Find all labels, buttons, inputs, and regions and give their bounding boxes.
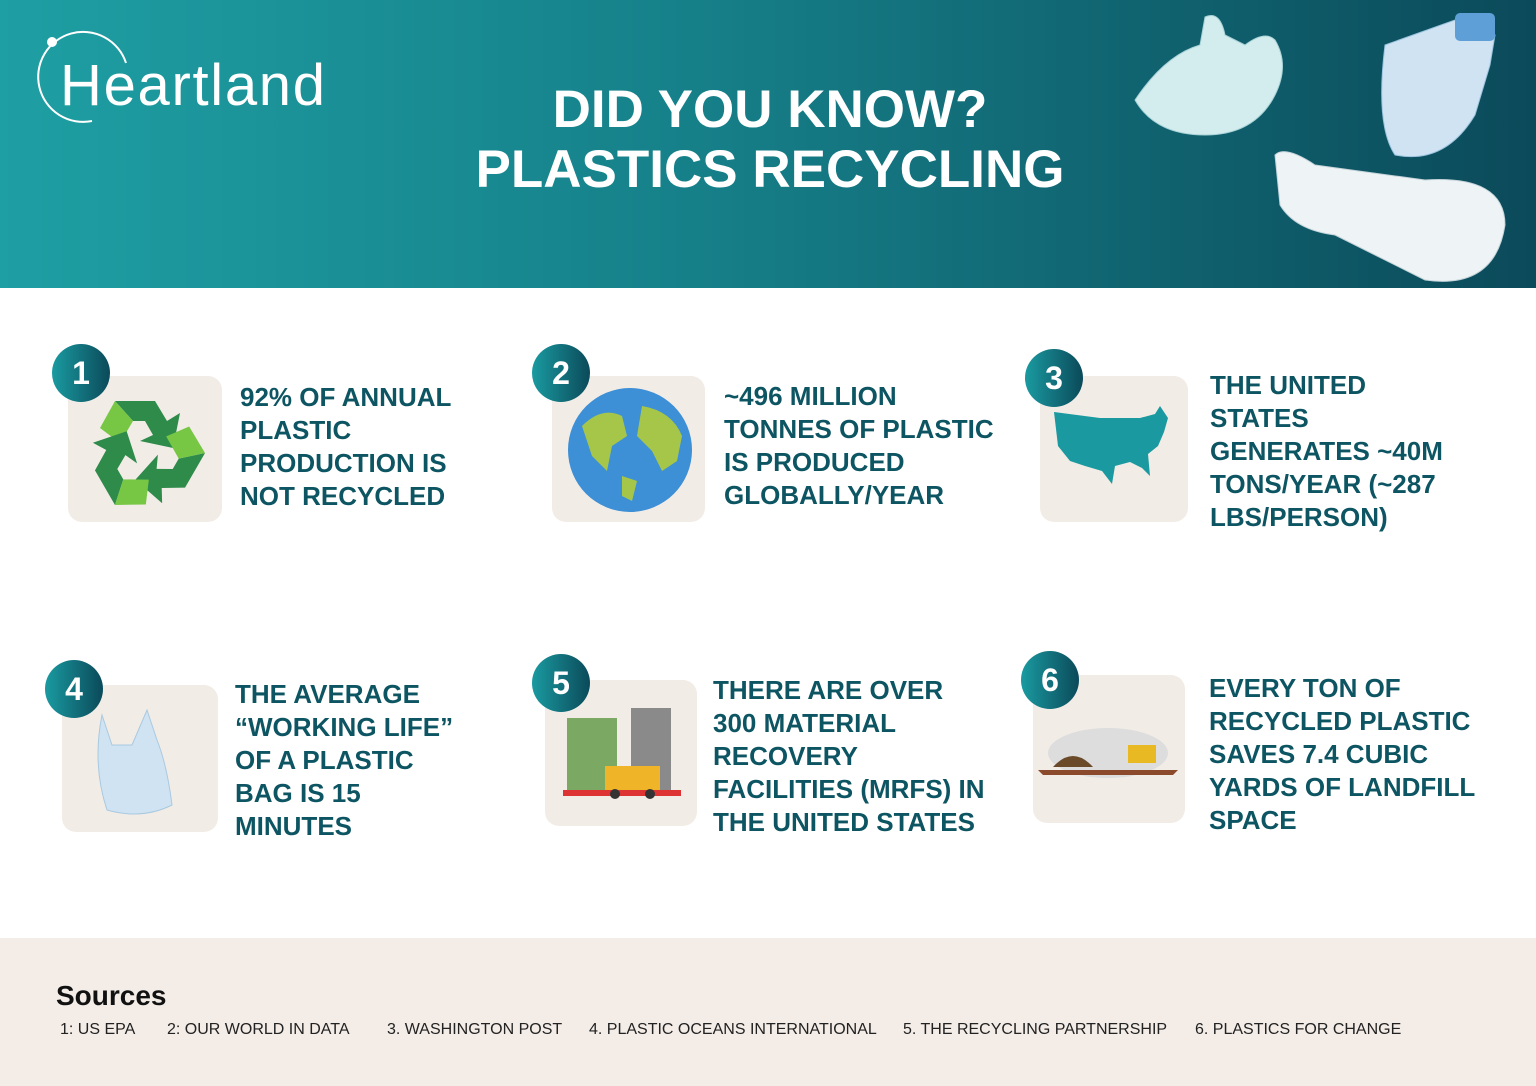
text 1 [240, 382, 451, 511]
text 1: PRODUCTION IS [240, 448, 447, 478]
tile 1 icon: recycle [68, 376, 222, 522]
badge 6 [1021, 651, 1079, 709]
text 1: 92% OF ANNUAL [240, 382, 451, 412]
header banner [0, 0, 1536, 288]
text 6: YARDS OF LANDFILL [1209, 772, 1475, 802]
badge 4 [45, 660, 103, 718]
illustration: plastic bag and bottles [1134, 13, 1506, 282]
badge 1 [52, 344, 110, 402]
text 3: TONS/YEAR (~287 [1210, 469, 1436, 499]
text 6: RECYCLED PLASTIC [1209, 706, 1470, 736]
text 4: THE AVERAGE [235, 679, 420, 709]
badge 3: 3 [1045, 360, 1063, 396]
sources heading: Sources [56, 980, 166, 1011]
badge 2 [532, 344, 590, 402]
text 4: “WORKING LIFE” [235, 712, 453, 742]
text 4 [235, 679, 453, 841]
text 1: NOT RECYCLED [240, 481, 445, 511]
text 4: BAG IS 15 [235, 778, 361, 808]
text 2: TONNES OF PLASTIC [724, 414, 994, 444]
source list: 3. WASHINGTON POST [387, 1021, 562, 1038]
badge 2: 2 [552, 355, 570, 391]
tile 4 icon: plastic bag [62, 685, 218, 832]
badge 1: 1 [72, 355, 90, 391]
title: PLASTICS RECYCLING [476, 140, 1064, 199]
tile 5 icon: recovery facility [545, 680, 697, 826]
card 5 [532, 654, 985, 837]
text 5 [713, 675, 985, 837]
card 3 [1025, 349, 1443, 532]
text 6: SPACE [1209, 805, 1297, 835]
text 5: FACILITIES (MRFS) IN [713, 774, 985, 804]
badge 3 [1025, 349, 1083, 407]
text 6: SAVES 7.4 CUBIC [1209, 739, 1428, 769]
source list: 2: OUR WORLD IN DATA [167, 1021, 350, 1038]
text 1: PLASTIC [240, 415, 351, 445]
text 3: THE UNITED [1210, 370, 1366, 400]
title: DID YOU KNOW? [553, 80, 987, 139]
text 2: GLOBALLY/YEAR [724, 480, 944, 510]
text 3 [1210, 370, 1443, 532]
source list [60, 1021, 1401, 1038]
title [476, 80, 1064, 199]
text 5: THE UNITED STATES [713, 807, 975, 837]
logo [37, 30, 325, 123]
text 2: IS PRODUCED [724, 447, 905, 477]
card 4 [45, 660, 453, 841]
tile 6 icon: landfill [1033, 675, 1185, 823]
source list: 5. THE RECYCLING PARTNERSHIP [903, 1021, 1167, 1038]
text 4: OF A PLASTIC [235, 745, 414, 775]
card 6 [1021, 651, 1475, 835]
source list: 1: US EPA [60, 1021, 135, 1038]
card 2 [532, 344, 994, 522]
source list: 6. PLASTICS FOR CHANGE [1195, 1021, 1401, 1038]
text 5: THERE ARE OVER [713, 675, 943, 705]
text 2: ~496 MILLION [724, 381, 897, 411]
badge 6: 6 [1041, 662, 1059, 698]
text 5: RECOVERY [713, 741, 858, 771]
source list: 4. PLASTIC OCEANS INTERNATIONAL [589, 1021, 877, 1038]
text 3: STATES [1210, 403, 1309, 433]
text 4: MINUTES [235, 811, 352, 841]
text 2 [724, 381, 994, 510]
sources footer [0, 938, 1536, 1086]
badge 5 [532, 654, 590, 712]
card 1 [52, 344, 451, 522]
text 6: EVERY TON OF [1209, 673, 1401, 703]
text 6 [1209, 673, 1475, 835]
tile 3 icon: USA map [1040, 376, 1188, 522]
badge 4: 4 [65, 671, 83, 707]
text 3: GENERATES ~40M [1210, 436, 1443, 466]
text 5: 300 MATERIAL [713, 708, 896, 738]
text 3: LBS/PERSON) [1210, 502, 1388, 532]
tile 2 icon: globe [552, 376, 705, 522]
logo: Heartland [60, 53, 325, 118]
badge 5: 5 [552, 665, 570, 701]
